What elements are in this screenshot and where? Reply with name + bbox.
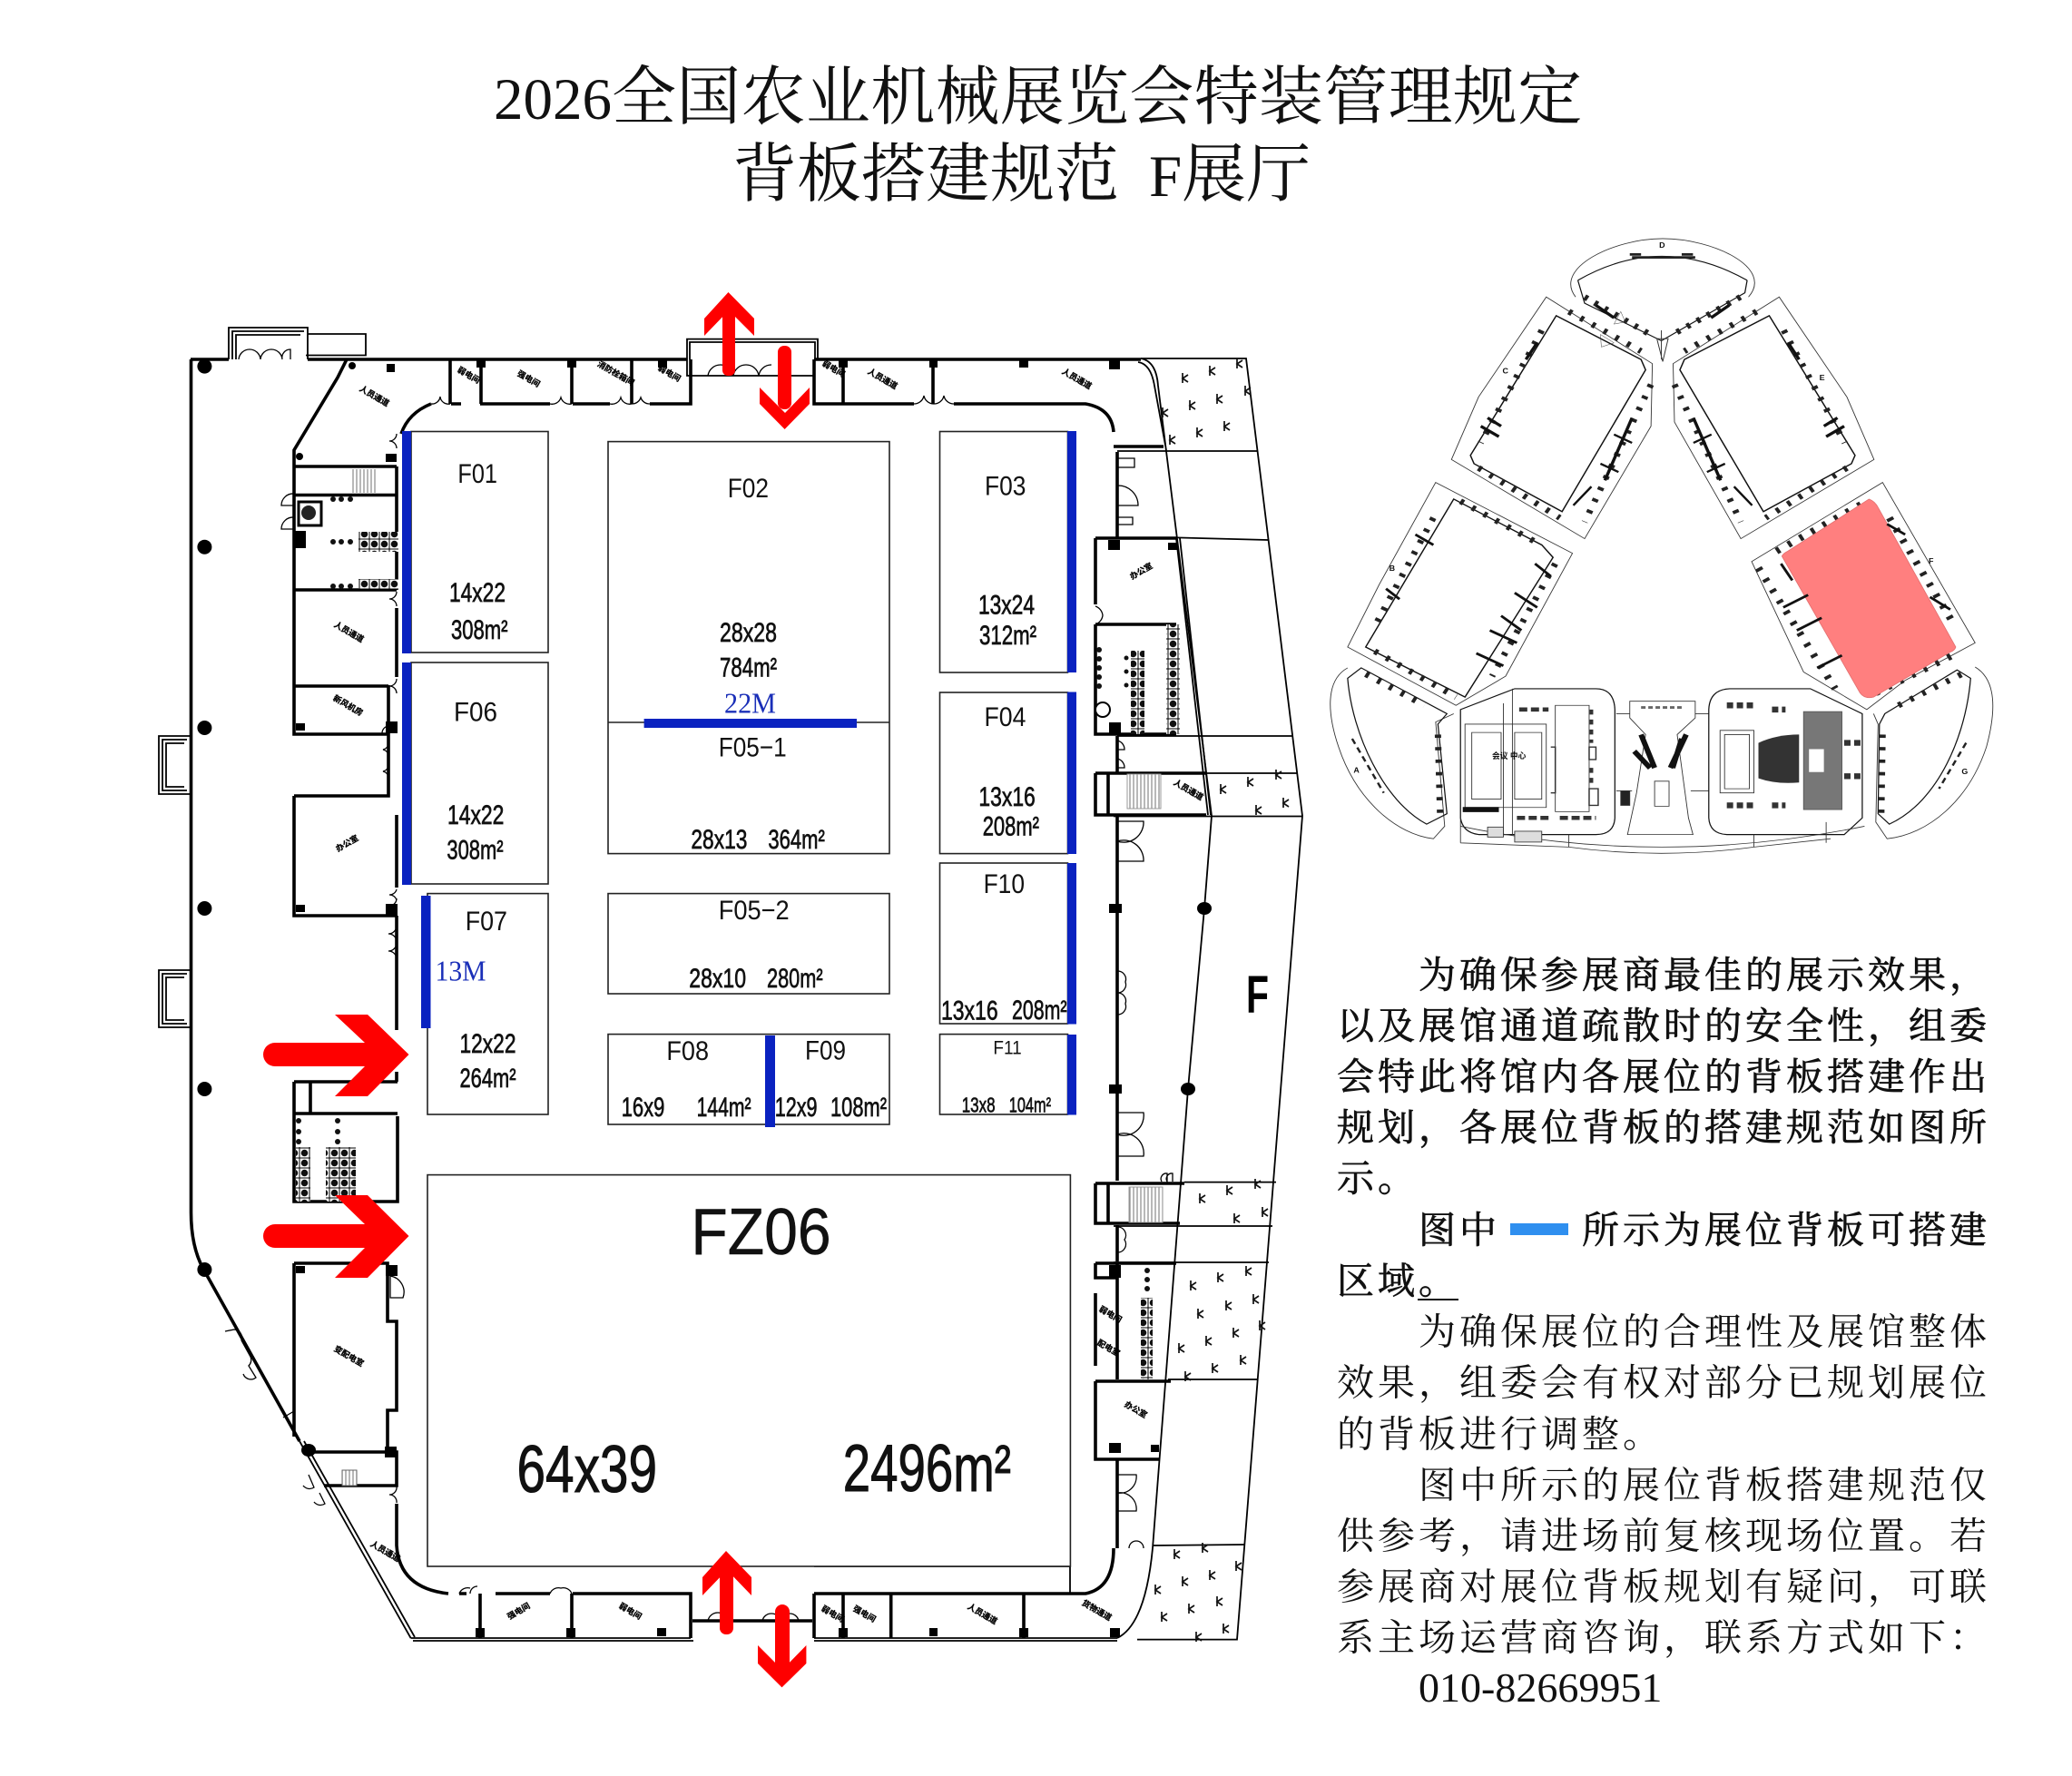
paragraph 2 with legend: 所示为展位背板可搭建 [1582, 1209, 1990, 1251]
arrow: bottom entrance down [758, 1604, 806, 1687]
thin outer and garden lines [159, 328, 1302, 1641]
F05-2 box [608, 894, 889, 994]
booth F05-2 [608, 894, 889, 994]
paragraph 1: 会特此将馆内各展位的背板搭建作出 [1337, 1056, 1990, 1098]
hall E [1657, 297, 1874, 539]
paragraph 2 with legend: 区域。 [1337, 1260, 1459, 1301]
F08 F09 labels [622, 1036, 887, 1123]
conference centre: 会议 中心 [1492, 751, 1527, 761]
F06 labels: 14x22 [447, 800, 504, 830]
hall A: A [1353, 766, 1360, 775]
F08 F09 labels: 108m² [830, 1093, 887, 1123]
F06 labels: F06 [454, 698, 497, 728]
F02 labels: 364m² [768, 825, 825, 855]
tiny room labels: 弱电间 [656, 362, 682, 383]
F08 F09 labels: F09 [805, 1036, 846, 1066]
booths F08 and F09 [608, 1035, 889, 1127]
washroom stalls [296, 496, 1180, 1379]
tiny room labels [331, 358, 1205, 1626]
F11 backboard [1067, 1035, 1076, 1114]
paragraph 3 [1337, 1310, 1990, 1456]
paragraph 1 [1337, 955, 1990, 1200]
F07 labels: F07 [466, 907, 507, 937]
arrow: west entrance upper [263, 1015, 408, 1096]
hall C [1451, 297, 1653, 539]
booth F04 [940, 692, 1076, 854]
F04 labels: F04 [984, 702, 1026, 732]
F10 backboard [1067, 863, 1076, 1024]
FZ06 box [427, 1175, 1070, 1566]
F02 labels: 28x28 [720, 618, 777, 648]
F08 F09 box [608, 1035, 889, 1124]
F07 backboard [421, 896, 430, 1028]
shared backboard [765, 1035, 775, 1127]
F03 labels: 312m² [979, 621, 1036, 651]
paragraph 4: 系主场运营商咨询，联系方式如下： [1337, 1617, 1990, 1659]
tiny room labels: 强电间 [851, 1603, 878, 1624]
F05-2 labels: F05−2 [719, 896, 790, 926]
tiny room labels: 配电室 [1095, 1337, 1122, 1358]
hall E: E [1820, 373, 1825, 382]
paragraph 1: 规划，各展位背板的搭建规范如图所 [1337, 1107, 1990, 1149]
F10 box [940, 863, 1067, 1024]
tiny room labels: 消防栓箱间 [596, 358, 636, 388]
F06 backboard [402, 662, 411, 885]
F07 labels: 264m² [459, 1064, 516, 1094]
doors [225, 349, 1173, 1621]
F01 box [411, 432, 548, 653]
hall G [1873, 667, 1993, 839]
arrow: bottom entrance up [702, 1551, 751, 1634]
title line 1: 2026全国农业机械展览会特装管理规定 [494, 63, 1583, 133]
legend: blue backboard line [1510, 1223, 1568, 1235]
F07 labels: 13M [436, 955, 486, 987]
tiny room labels: 强电间 [506, 1600, 532, 1621]
hall letter F: F [1246, 966, 1269, 1025]
booth FZ06 [427, 1175, 1070, 1566]
F05-2 labels: 280m² [767, 964, 823, 994]
tiny room labels: 办公室 [1128, 560, 1154, 581]
F05-2 labels: 28x10 [689, 964, 746, 994]
tiny room labels: 弱电间 [820, 1603, 846, 1624]
hall D [1571, 239, 1754, 340]
paragraph 2 with legend [1337, 1209, 1990, 1301]
F04 backboard [1067, 692, 1076, 854]
paragraph 1: 以及展馆通道疏散时的安全性，组委 [1337, 1006, 1990, 1047]
tiny room labels: 办公室 [1123, 1398, 1149, 1419]
tiny room labels: 弱电间 [617, 1600, 643, 1621]
tiny room labels: 强电间 [516, 368, 542, 388]
stage block [1803, 711, 1842, 810]
explanatory text [1337, 955, 1990, 1711]
booth F10 [940, 863, 1076, 1025]
F08 F09 labels: 16x9 [622, 1093, 664, 1123]
tiny room labels: 变配电室 [332, 1343, 366, 1369]
F02 labels: 784m² [720, 653, 777, 682]
F06 labels [447, 698, 504, 865]
tiny room labels: 办公室 [334, 832, 360, 853]
F06 labels: 308m² [447, 835, 504, 865]
tiny room labels: 人员通道 [866, 366, 899, 391]
F06 box [411, 662, 548, 884]
F01 labels: 308m² [451, 615, 508, 645]
shared backboard [644, 719, 857, 728]
hall F highlighted: F [1929, 556, 1933, 565]
paragraph 2 with legend: 图中 [1419, 1209, 1500, 1251]
F02 labels: F02 [728, 474, 769, 504]
hall C: C [1502, 367, 1508, 375]
paragraph 3: 的背板进行调整。 [1337, 1414, 1664, 1456]
F04 labels: 208m² [983, 811, 1039, 842]
tiny room labels: 人员通道 [966, 1601, 999, 1626]
F03 labels [978, 472, 1036, 651]
central atrium [1616, 702, 1709, 835]
F11 labels: 104m² [1009, 1094, 1051, 1117]
F03 labels: F03 [985, 472, 1026, 501]
paragraph 1: 示。 [1337, 1158, 1419, 1200]
F01 labels: 14x22 [449, 578, 506, 608]
F11 box [940, 1035, 1067, 1114]
hall D: D [1659, 240, 1665, 250]
hall B: B [1390, 564, 1395, 573]
tiny room labels: 人员通道 [1060, 366, 1094, 391]
hall F highlighted [1752, 483, 1975, 710]
garden planting marks [1155, 358, 1289, 1642]
hall B [1348, 483, 1573, 705]
booth F06 [402, 662, 548, 885]
F11 labels: F11 [993, 1037, 1022, 1058]
F04 labels: 13x16 [978, 782, 1036, 812]
F10 labels: F10 [984, 869, 1025, 899]
F02 labels: 28x13 [691, 825, 747, 855]
title [494, 63, 1583, 211]
F02 box [608, 442, 889, 854]
F01 backboard [402, 431, 411, 653]
structural columns [197, 358, 1212, 1637]
FZ06 name: FZ06 [691, 1196, 831, 1269]
booth F02 and F05-1 [608, 442, 889, 855]
tiny room labels: 人员通道 [1172, 777, 1205, 802]
floor plan: hall F [159, 328, 1302, 1642]
F08 F09 labels: F08 [666, 1036, 709, 1066]
south forecourt [1460, 818, 1864, 853]
paragraph 3: 效果，组委会有权对部分已规划展位 [1337, 1361, 1990, 1403]
paragraph 4: 图中所示的展位背板搭建规范仅 [1419, 1465, 1990, 1506]
arrow: top entrance up [704, 292, 754, 376]
FZ06 size: 64x39 [517, 1433, 657, 1506]
divider [608, 721, 889, 723]
title line 2: 背板搭建规范 F展厅 [732, 140, 1311, 211]
FZ06 area: 2496m² [843, 1432, 1011, 1506]
theatre seating [1759, 734, 1799, 783]
phone number: 010-82669951 [1419, 1664, 1662, 1711]
tiny room labels: 人员通道 [358, 383, 391, 408]
paragraph 4: 供参考，请进场前复核现场位置。若 [1337, 1516, 1990, 1557]
hall G: G [1961, 767, 1969, 776]
paragraph 4: 参展商对展位背板规划有疑问，可联 [1337, 1566, 1990, 1608]
F07 labels: 12x22 [459, 1029, 516, 1059]
F10 labels [941, 869, 1067, 1025]
F03 backboard [1067, 431, 1076, 672]
arrow: west entrance lower [263, 1195, 408, 1278]
tiny room labels: 弱电间 [1097, 1303, 1124, 1324]
red hall F fill [1782, 499, 1956, 698]
booth F03 [940, 431, 1076, 672]
paragraph 1: 为确保参展商最佳的展示效果， [1419, 955, 1990, 996]
F08 F09 labels: 144m² [697, 1093, 751, 1123]
tiny room labels: 人员通道 [332, 619, 366, 644]
tiny room labels: 弱电间 [820, 358, 847, 378]
paragraph 3: 为确保展位的合理性及展馆整体 [1419, 1310, 1990, 1352]
tiny room labels: 新风机房 [331, 692, 365, 718]
F02 labels: 22M [724, 687, 776, 720]
paragraph 4 [1337, 1465, 1990, 1659]
F04 labels [978, 702, 1039, 842]
F07 box [427, 894, 548, 1114]
F10 labels: 13x16 [941, 996, 998, 1025]
building walls [191, 359, 1206, 1638]
F05-2 labels [689, 896, 823, 994]
site key map [1331, 239, 1993, 853]
booth F11 [940, 1035, 1076, 1117]
F08 F09 labels: 12x9 [775, 1093, 818, 1123]
F10 labels: 208m² [1012, 996, 1067, 1025]
tiny room labels: 弱电间 [456, 364, 482, 385]
F07 labels [436, 907, 516, 1094]
F03 box [940, 432, 1067, 672]
F01 labels: F01 [457, 459, 497, 489]
F02 labels: F05−1 [719, 733, 787, 762]
F11 labels [962, 1037, 1051, 1117]
F04 box [940, 692, 1067, 854]
tiny room labels: 货物通道 [1080, 1597, 1114, 1623]
staircases [342, 469, 1163, 1486]
F11 labels: 13x8 [962, 1094, 996, 1117]
theatre building [1709, 689, 1862, 835]
F02 labels [691, 474, 825, 855]
booth F07 [421, 894, 548, 1114]
arrow: top entrance down [760, 346, 810, 429]
conference centre [1460, 689, 1615, 835]
tiny room labels: 人员通道 [368, 1538, 402, 1564]
F03 labels: 13x24 [978, 590, 1035, 620]
F01 labels [449, 459, 508, 645]
hall A [1331, 668, 1454, 839]
booth F01 [402, 431, 548, 653]
